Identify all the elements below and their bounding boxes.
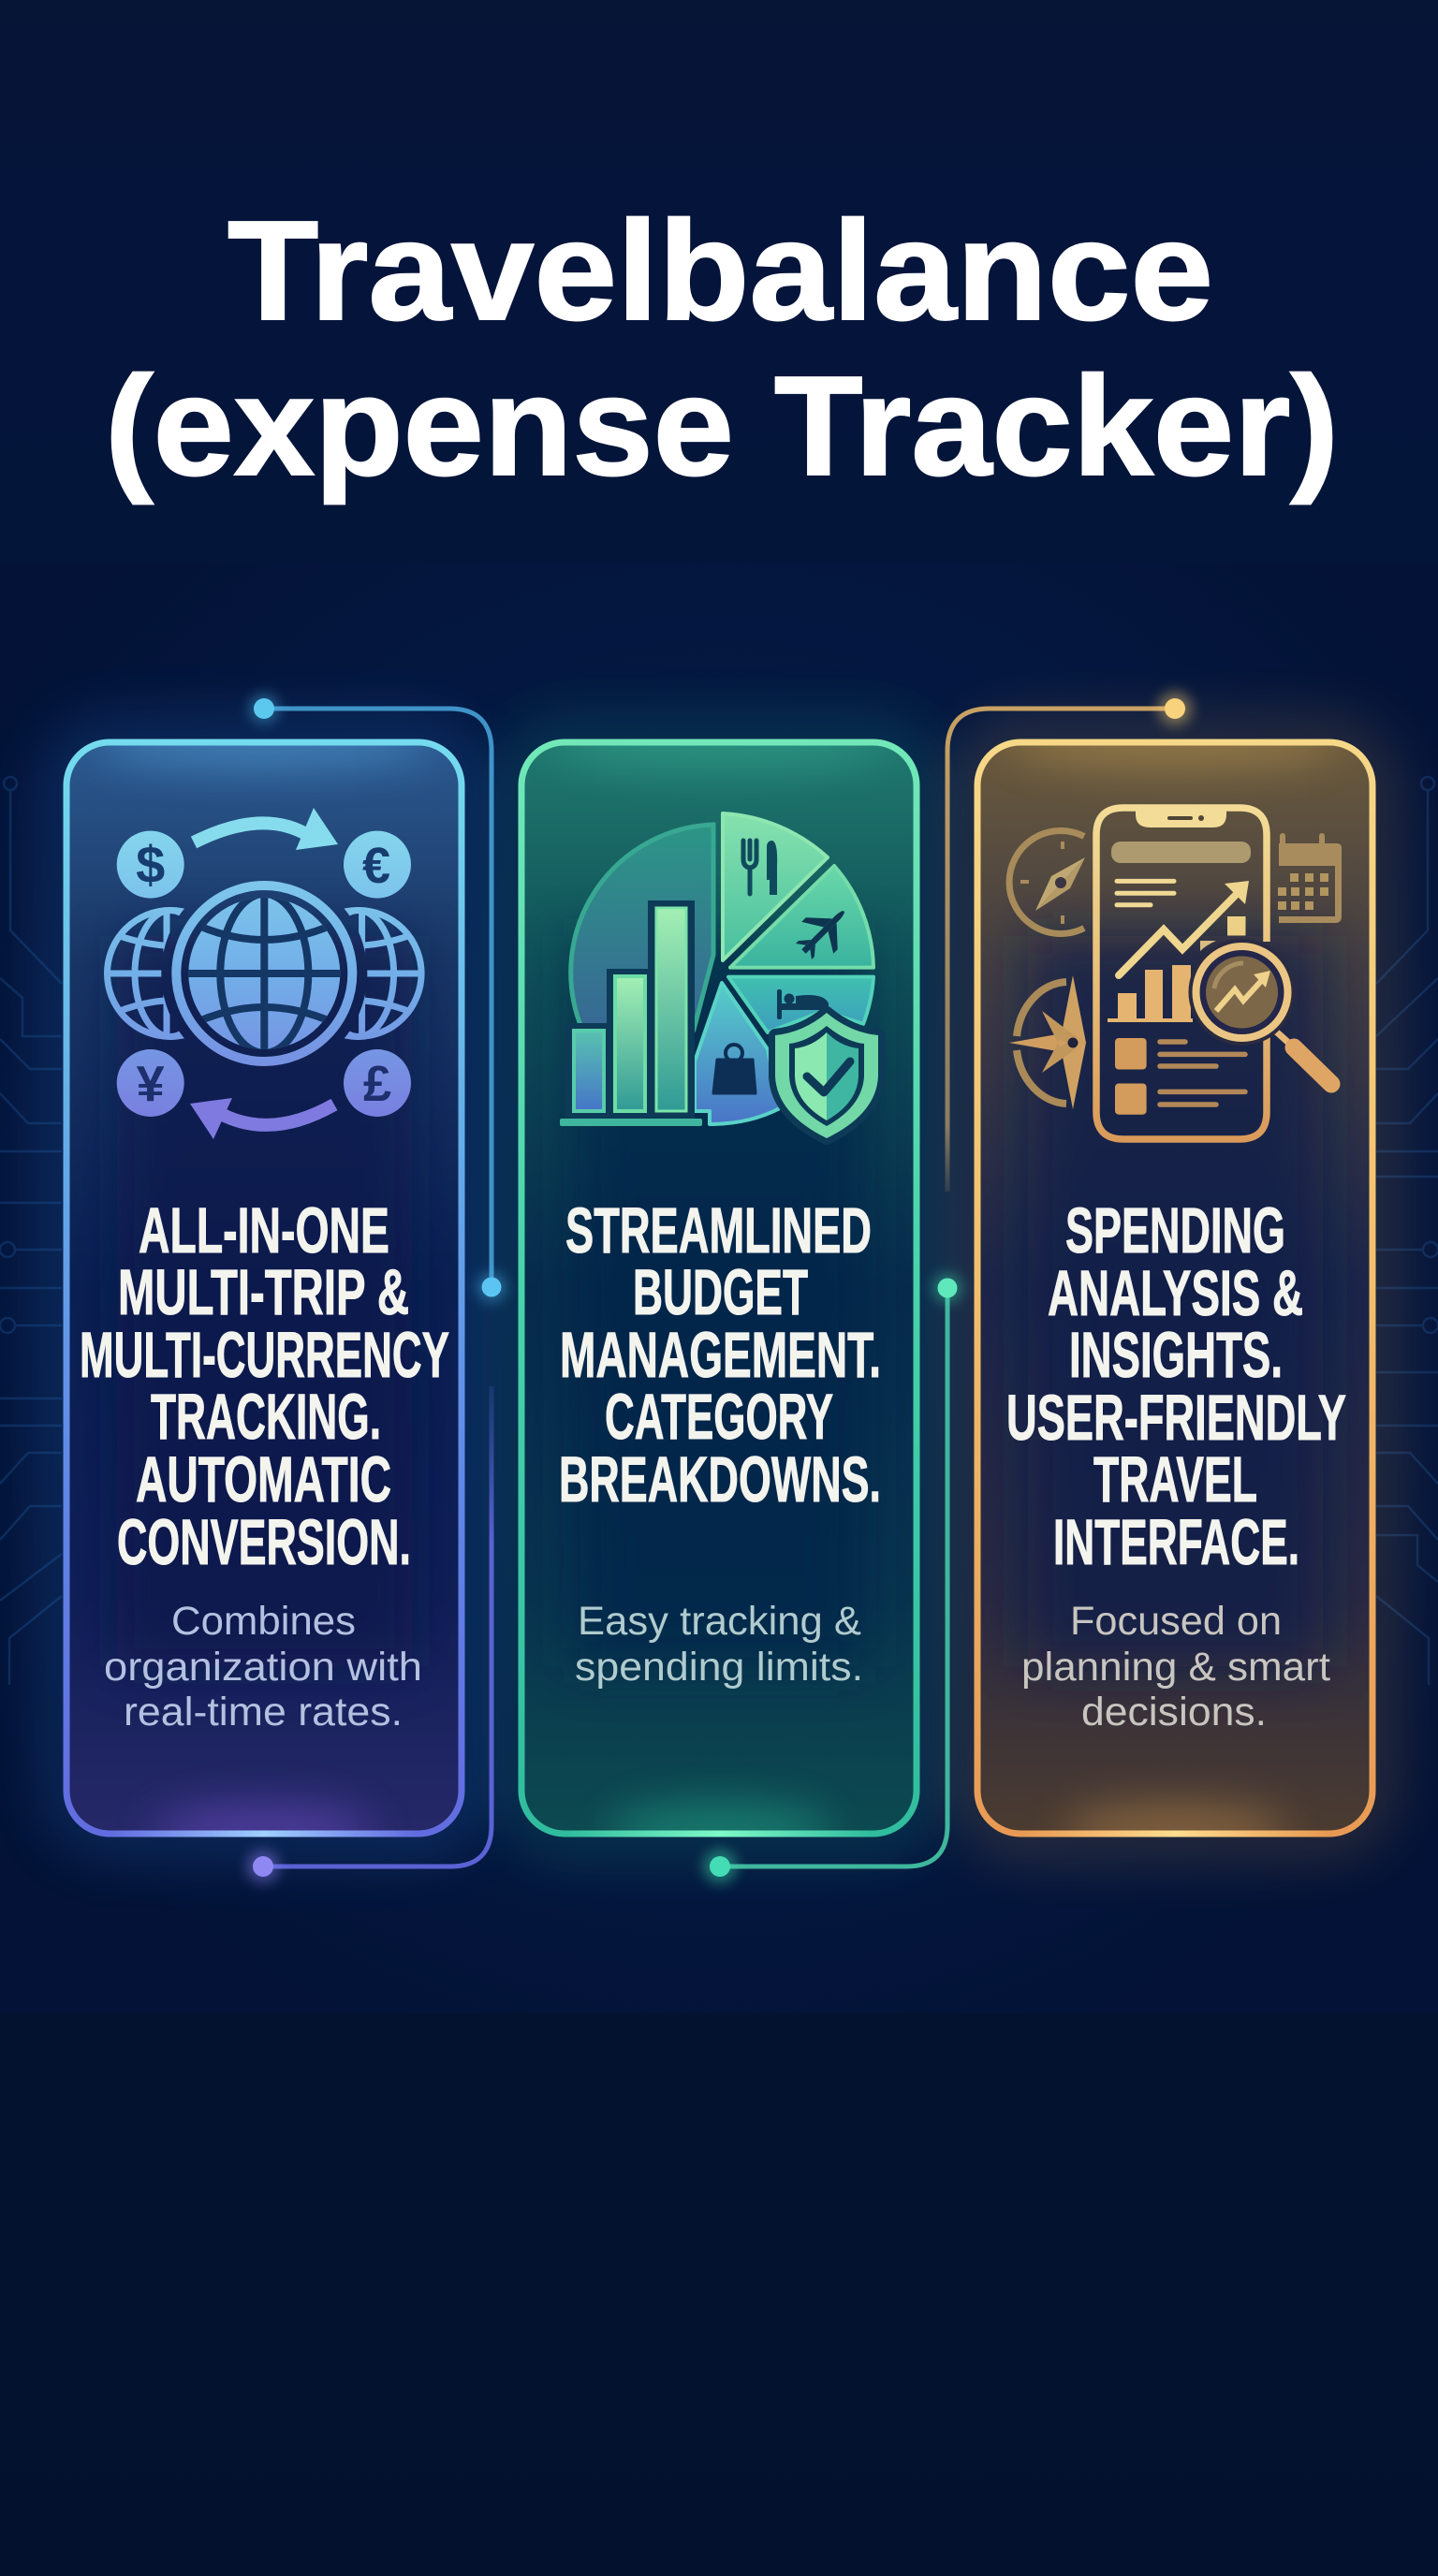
calendar	[1278, 836, 1342, 923]
circuit traces: right side	[1376, 777, 1438, 1685]
compass	[1009, 831, 1085, 934]
compass rose	[1009, 975, 1086, 1109]
pie sector: base	[571, 825, 713, 1030]
icon: globe with currency exchange	[107, 808, 421, 1139]
heading: card 2	[559, 1194, 881, 1515]
heading: card 1: AUTOMATIC	[136, 1443, 391, 1515]
mini bar chart	[1108, 965, 1193, 1022]
description: card 1: real-time rates.	[124, 1690, 403, 1734]
pie slice: food	[723, 813, 828, 960]
description: card 2: Easy tracking &	[578, 1599, 861, 1644]
coin: pound: £	[363, 1056, 391, 1112]
coin: yen	[117, 1049, 184, 1117]
trend line arrow	[1119, 881, 1249, 975]
heading: card 2: STREAMLINED	[565, 1194, 872, 1266]
magnifier	[1189, 939, 1331, 1084]
panel: card 1	[66, 720, 462, 1856]
connector: card 1 side to bottom	[246, 1386, 492, 1883]
icon: pie chart, bars and shield	[560, 813, 878, 1138]
description: card 3: planning & smart	[1021, 1645, 1330, 1690]
title: (expense Tracker)	[105, 346, 1339, 505]
circuit traces: left side	[0, 777, 62, 1685]
connector: card 1 top to side	[249, 694, 506, 1302]
description: card 1	[104, 1599, 422, 1734]
coin: euro: €	[362, 838, 390, 894]
coin: dollar: $	[136, 835, 165, 894]
heading: card 1: ALL-IN-ONE	[139, 1194, 389, 1266]
heading: card 3: ANALYSIS &	[1048, 1257, 1303, 1329]
heading: card 1: MULTI-CURRENCY	[80, 1319, 449, 1391]
pie slice: lodging	[728, 977, 873, 1032]
coin: yen: ¥	[137, 1056, 165, 1112]
heading: card 2: BREAKDOWNS.	[559, 1443, 881, 1515]
heading: card 1: MULTI-TRIP &	[118, 1256, 409, 1328]
coin: dollar	[117, 831, 184, 899]
description: card 1: organization with	[104, 1645, 422, 1690]
coin: euro	[344, 831, 411, 899]
description: card 2: spending limits.	[575, 1645, 863, 1690]
panel: card 2	[521, 720, 917, 1856]
pie slice: shopping	[695, 983, 780, 1124]
side globes	[107, 910, 421, 1037]
heading: card 3: SPENDING	[1065, 1194, 1285, 1266]
title	[105, 191, 1339, 505]
heading: card 2: BUDGET	[633, 1256, 808, 1328]
heading: card 1: CONVERSION.	[117, 1506, 411, 1578]
heading: card 1: TRACKING.	[151, 1381, 381, 1453]
arrow: top exchange	[194, 808, 338, 850]
arrow: bottom exchange	[190, 1098, 334, 1139]
shield with check	[775, 1013, 878, 1138]
glow halos	[66, 742, 1372, 1834]
heading: card 3	[1006, 1194, 1346, 1578]
heading: card 1	[80, 1194, 449, 1578]
title: Travelbalance	[227, 191, 1213, 349]
connector: card 2 bottom to side	[703, 1273, 962, 1883]
phone frame	[1096, 808, 1267, 1139]
description: card 1: Combines	[171, 1599, 356, 1644]
main globe	[176, 886, 352, 1061]
panel: card 3	[977, 720, 1372, 1856]
description: card 2	[575, 1599, 863, 1690]
description: card 3: Focused on	[1070, 1599, 1282, 1644]
description: card 3: decisions.	[1081, 1690, 1267, 1734]
heading: card 3: INSIGHTS.	[1069, 1319, 1283, 1391]
heading: card 2: CATEGORY	[605, 1381, 833, 1453]
coin: pound	[344, 1049, 411, 1117]
heading: card 3: INTERFACE.	[1053, 1506, 1299, 1578]
bar chart	[560, 900, 702, 1126]
heading: card 3: TRAVEL	[1093, 1443, 1257, 1515]
list rows	[1115, 1038, 1245, 1115]
description: card 3	[1021, 1599, 1330, 1734]
connector: card 3 top to side	[947, 692, 1192, 1192]
heading: card 2: MANAGEMENT.	[560, 1319, 881, 1391]
pie slice: flights	[730, 866, 873, 968]
icon: phone analytics	[1009, 808, 1342, 1139]
